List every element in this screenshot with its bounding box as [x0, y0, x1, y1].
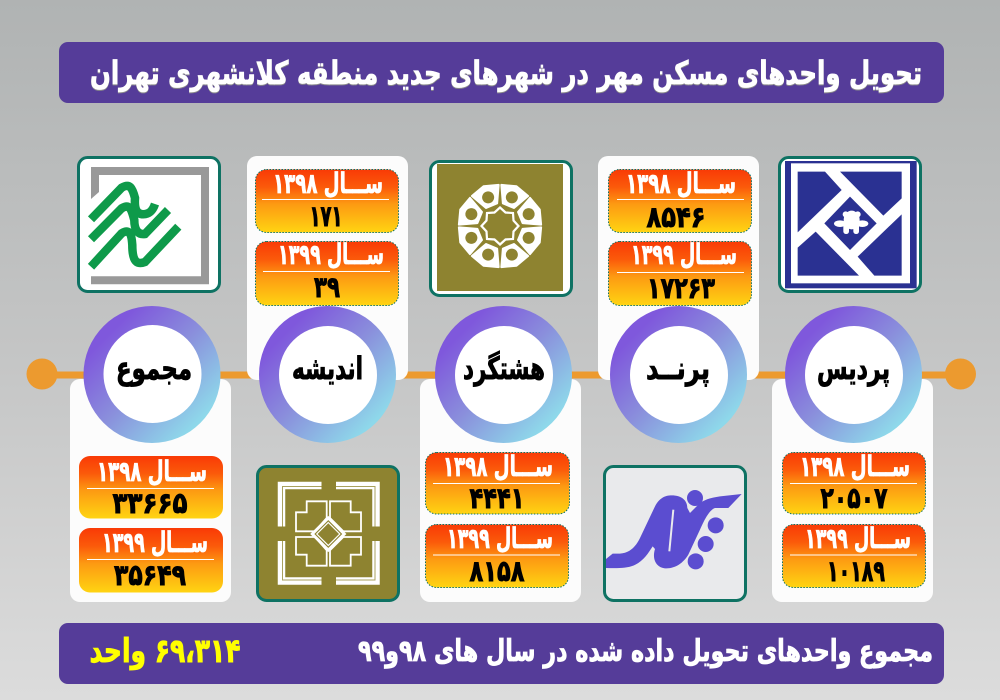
logo: parand purple	[604, 466, 746, 600]
ring: andisheh	[259, 306, 396, 443]
badge 1398	[256, 167, 398, 233]
badge 1398: ۳۳۶۶۵	[112, 486, 188, 520]
badge 1398: ســـال ۱۳۹۸	[273, 167, 383, 200]
timeline end dot	[945, 358, 976, 390]
badge 1398	[782, 450, 926, 515]
badge 1399: ســـال ۱۳۹۹	[102, 526, 208, 559]
footer total: ۶۹،۳۱۴ واحد	[90, 631, 241, 671]
logo: hashtgerd rosette	[430, 162, 572, 296]
badge 1398: ســـال ۱۳۹۸	[800, 450, 910, 483]
title banner	[59, 42, 944, 103]
badge 1399	[79, 526, 223, 592]
badge 1398: ســـال ۱۳۹۸	[626, 167, 736, 200]
badge 1399: ســـال ۱۳۹۹	[447, 522, 553, 555]
ring: parand	[610, 306, 747, 443]
badge 1398: ۲۰۵۰۷	[820, 481, 888, 515]
ring: andisheh: اندیشه	[292, 351, 363, 387]
badge 1399: ۱۰۱۸۹	[827, 554, 885, 588]
timeline line	[26, 358, 976, 390]
timeline start dot	[26, 358, 58, 390]
badge 1398: ۸۵۴۶	[646, 200, 706, 234]
badge 1398	[79, 455, 223, 520]
panel: parand card	[598, 156, 759, 380]
badge 1399: ۳۵۶۴۹	[114, 558, 186, 592]
badge 1398	[426, 450, 570, 515]
ring: majmou	[84, 306, 220, 443]
panel: andisheh card	[247, 156, 408, 380]
badge 1398: ۱۷۱	[310, 199, 342, 233]
logo: pardis blue square	[780, 158, 920, 292]
ring: hashtgerd: هشتگرد	[463, 350, 545, 387]
panel: pardis card	[772, 379, 933, 602]
ring: hashtgerd	[435, 306, 572, 443]
icon: flower	[834, 211, 868, 234]
badge 1398	[608, 167, 752, 234]
badge 1399: ۳۹	[314, 270, 340, 304]
badge 1399	[782, 522, 926, 588]
ring: majmou: مجموع	[116, 351, 192, 387]
ring: pardis	[785, 306, 922, 443]
badge 1399	[426, 522, 568, 588]
badge 1399: ســـال ۱۳۹۹	[631, 238, 737, 271]
badge 1399: ســـال ۱۳۹۹	[805, 522, 911, 555]
badge 1398: ۴۴۴۱	[470, 481, 524, 515]
logo: andisheh geometric	[258, 466, 398, 600]
badge 1399: ۸۱۵۸	[470, 554, 525, 588]
badge 1399: ۱۷۲۶۳	[647, 271, 715, 305]
ring: parand: پرنــد	[646, 351, 710, 387]
panel: hashtgerd card	[420, 379, 581, 602]
badge 1399	[608, 238, 752, 306]
badge 1398: ســـال ۱۳۹۸	[97, 455, 207, 488]
badge 1399	[256, 238, 398, 306]
logo: majmou green stripes	[78, 158, 220, 292]
footer banner	[59, 623, 944, 684]
badge 1399: ســـال ۱۳۹۹	[278, 238, 384, 271]
ring: pardis: پردیس	[817, 351, 890, 387]
badge 1398: ســـال ۱۳۹۸	[443, 450, 553, 483]
panel: majmou card	[70, 379, 231, 602]
